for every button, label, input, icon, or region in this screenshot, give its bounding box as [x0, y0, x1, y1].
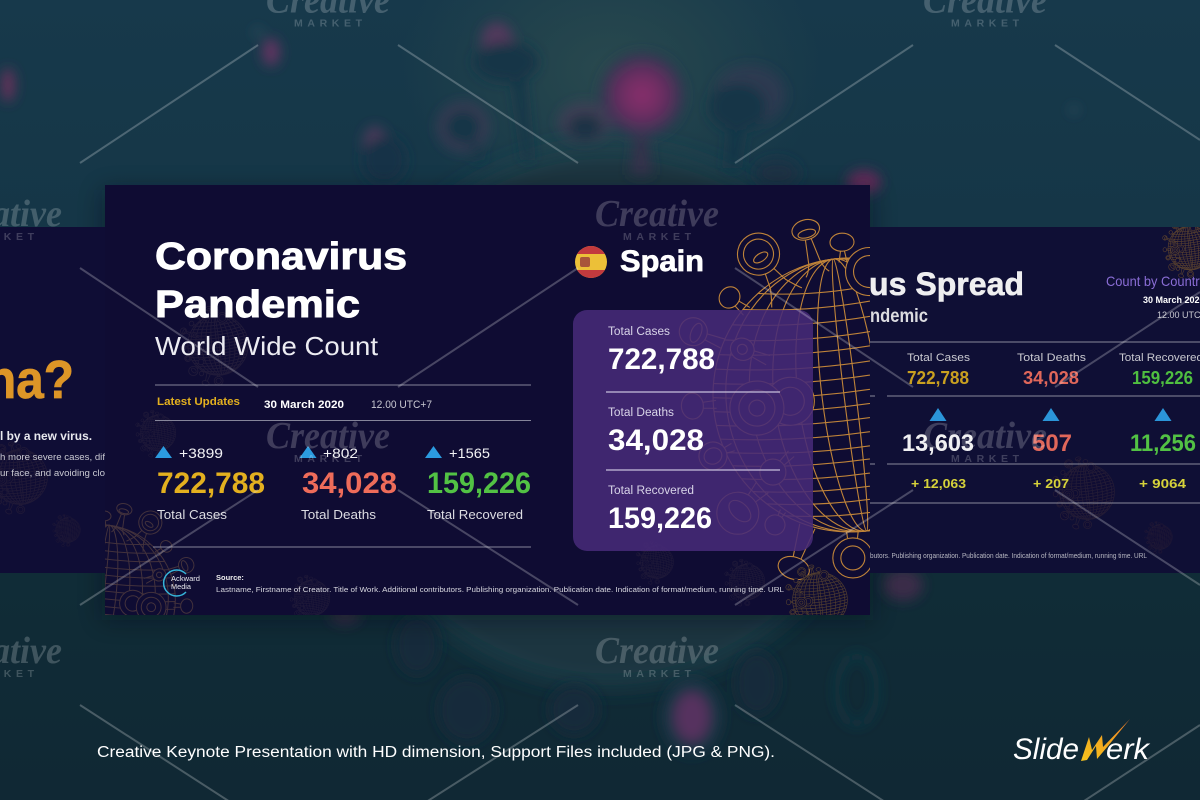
panel: main slide — [105, 185, 870, 615]
panel shadow — [102, 190, 873, 620]
bottom spikes — [662, 679, 722, 755]
stat: total cases: +3899 — [179, 445, 223, 461]
stat: total deaths — [300, 445, 397, 522]
stat: total recovered: Total Recovered — [427, 508, 523, 522]
card: total recovered: Total Recovered — [608, 485, 694, 497]
right slide heading: ndemic — [870, 306, 928, 327]
stat: total cases — [155, 445, 265, 522]
title: Pandemic — [155, 284, 360, 326]
logo: Ackward Media — [164, 570, 200, 596]
stat: total deaths: +802 — [323, 445, 358, 461]
right slide daily values — [903, 434, 1196, 455]
left slide text — [0, 429, 106, 478]
virus illustration: bottom left — [105, 503, 194, 615]
country name: Spain — [620, 245, 704, 278]
logo: SlideWerk — [1013, 719, 1151, 766]
right slide source line: butors. Publishing organization. Publication date. Indication of format/medium, running time. URL — [870, 551, 1147, 560]
right slide column labels: Total Deaths — [1017, 352, 1087, 364]
icon: Spain flag — [575, 246, 607, 278]
card: total recovered: 159,226 — [608, 502, 712, 535]
panel: left slide — [0, 227, 106, 573]
card: total recovered — [608, 485, 712, 535]
stat: total cases: Total Cases — [157, 508, 227, 522]
faint virus decorations — [135, 306, 767, 623]
date row — [157, 396, 432, 411]
right slide totals: 722,788 — [907, 368, 969, 388]
right slide totals: 159,226 — [1132, 368, 1193, 388]
card: total cases: 722,788 — [608, 343, 715, 376]
right slide daily values: 13,603 — [902, 430, 974, 457]
right slide up arrows — [930, 408, 1172, 421]
stat: total deaths: Total Deaths — [301, 508, 376, 522]
card: total deaths: 34,028 — [608, 424, 704, 457]
logo: SlideWerk: erk — [1106, 733, 1151, 766]
faint virus decorations — [1052, 219, 1200, 554]
source: Source: — [216, 573, 244, 582]
left slide text: l by a new virus. — [0, 429, 92, 443]
right slide heading: us Spread — [869, 266, 1024, 302]
stat: total recovered — [425, 445, 531, 522]
left slide text: ur face, and avoiding clo — [0, 468, 105, 478]
stat: total recovered: 159,226 — [427, 467, 531, 500]
logo: SlideWerk: Slide — [1013, 733, 1079, 766]
right slide totals — [908, 371, 1192, 387]
right slide daily values: 11,256 — [1130, 430, 1196, 457]
left slide text: h more severe cases, dif — [0, 452, 106, 462]
panel: country card — [573, 310, 813, 551]
title — [155, 236, 407, 361]
watermark grid — [0, 0, 1047, 680]
panel: right slide — [869, 219, 1200, 573]
date row: 12.00 UTC+7 — [371, 399, 432, 411]
date row: Latest Updates — [157, 396, 240, 408]
stat: total recovered: +1565 — [449, 445, 490, 461]
card: total deaths: Total Deaths — [608, 407, 674, 419]
right slide column labels: Total Recovered — [1119, 352, 1200, 364]
right slide heading — [870, 271, 1022, 322]
right slide increments: + 9064 — [1139, 476, 1187, 491]
logo: Ackward Media: Ackward — [171, 574, 200, 583]
caption: Creative Keynote Presentation with HD dimension, Support Files included (JPG & PNG). — [97, 744, 775, 761]
right slide totals: 34,028 — [1023, 368, 1079, 388]
source: Lastname, Firstname of Creator. Title of Work. Additional contributors. Publishing organization. Publication date. Indication of format/medium, running time. URL — [216, 585, 784, 594]
stat: total deaths: 34,028 — [302, 467, 397, 500]
card: total cases — [608, 326, 715, 376]
right slide daily values: 507 — [1032, 430, 1072, 457]
date row: 30 March 2020 — [264, 399, 344, 411]
card: total deaths — [608, 407, 704, 457]
subtitle: World Wide Count — [155, 331, 379, 361]
right slide column labels: Total Cases — [907, 352, 971, 364]
logo: Ackward Media: Media — [171, 582, 192, 591]
title: Coronavirus — [155, 236, 407, 278]
right slide increments — [912, 479, 1186, 490]
source — [216, 573, 784, 594]
right slide column labels — [907, 353, 1200, 361]
right slide date block — [1106, 276, 1200, 318]
right slide increments: + 207 — [1033, 476, 1069, 491]
virus illustration: large — [678, 218, 870, 615]
top spikes — [630, 128, 652, 175]
card: total cases: Total Cases — [608, 326, 670, 338]
faint virus decorations — [0, 441, 82, 547]
stat: total cases: 722,788 — [157, 467, 265, 500]
right slide increments: + 12,063 — [911, 476, 966, 491]
